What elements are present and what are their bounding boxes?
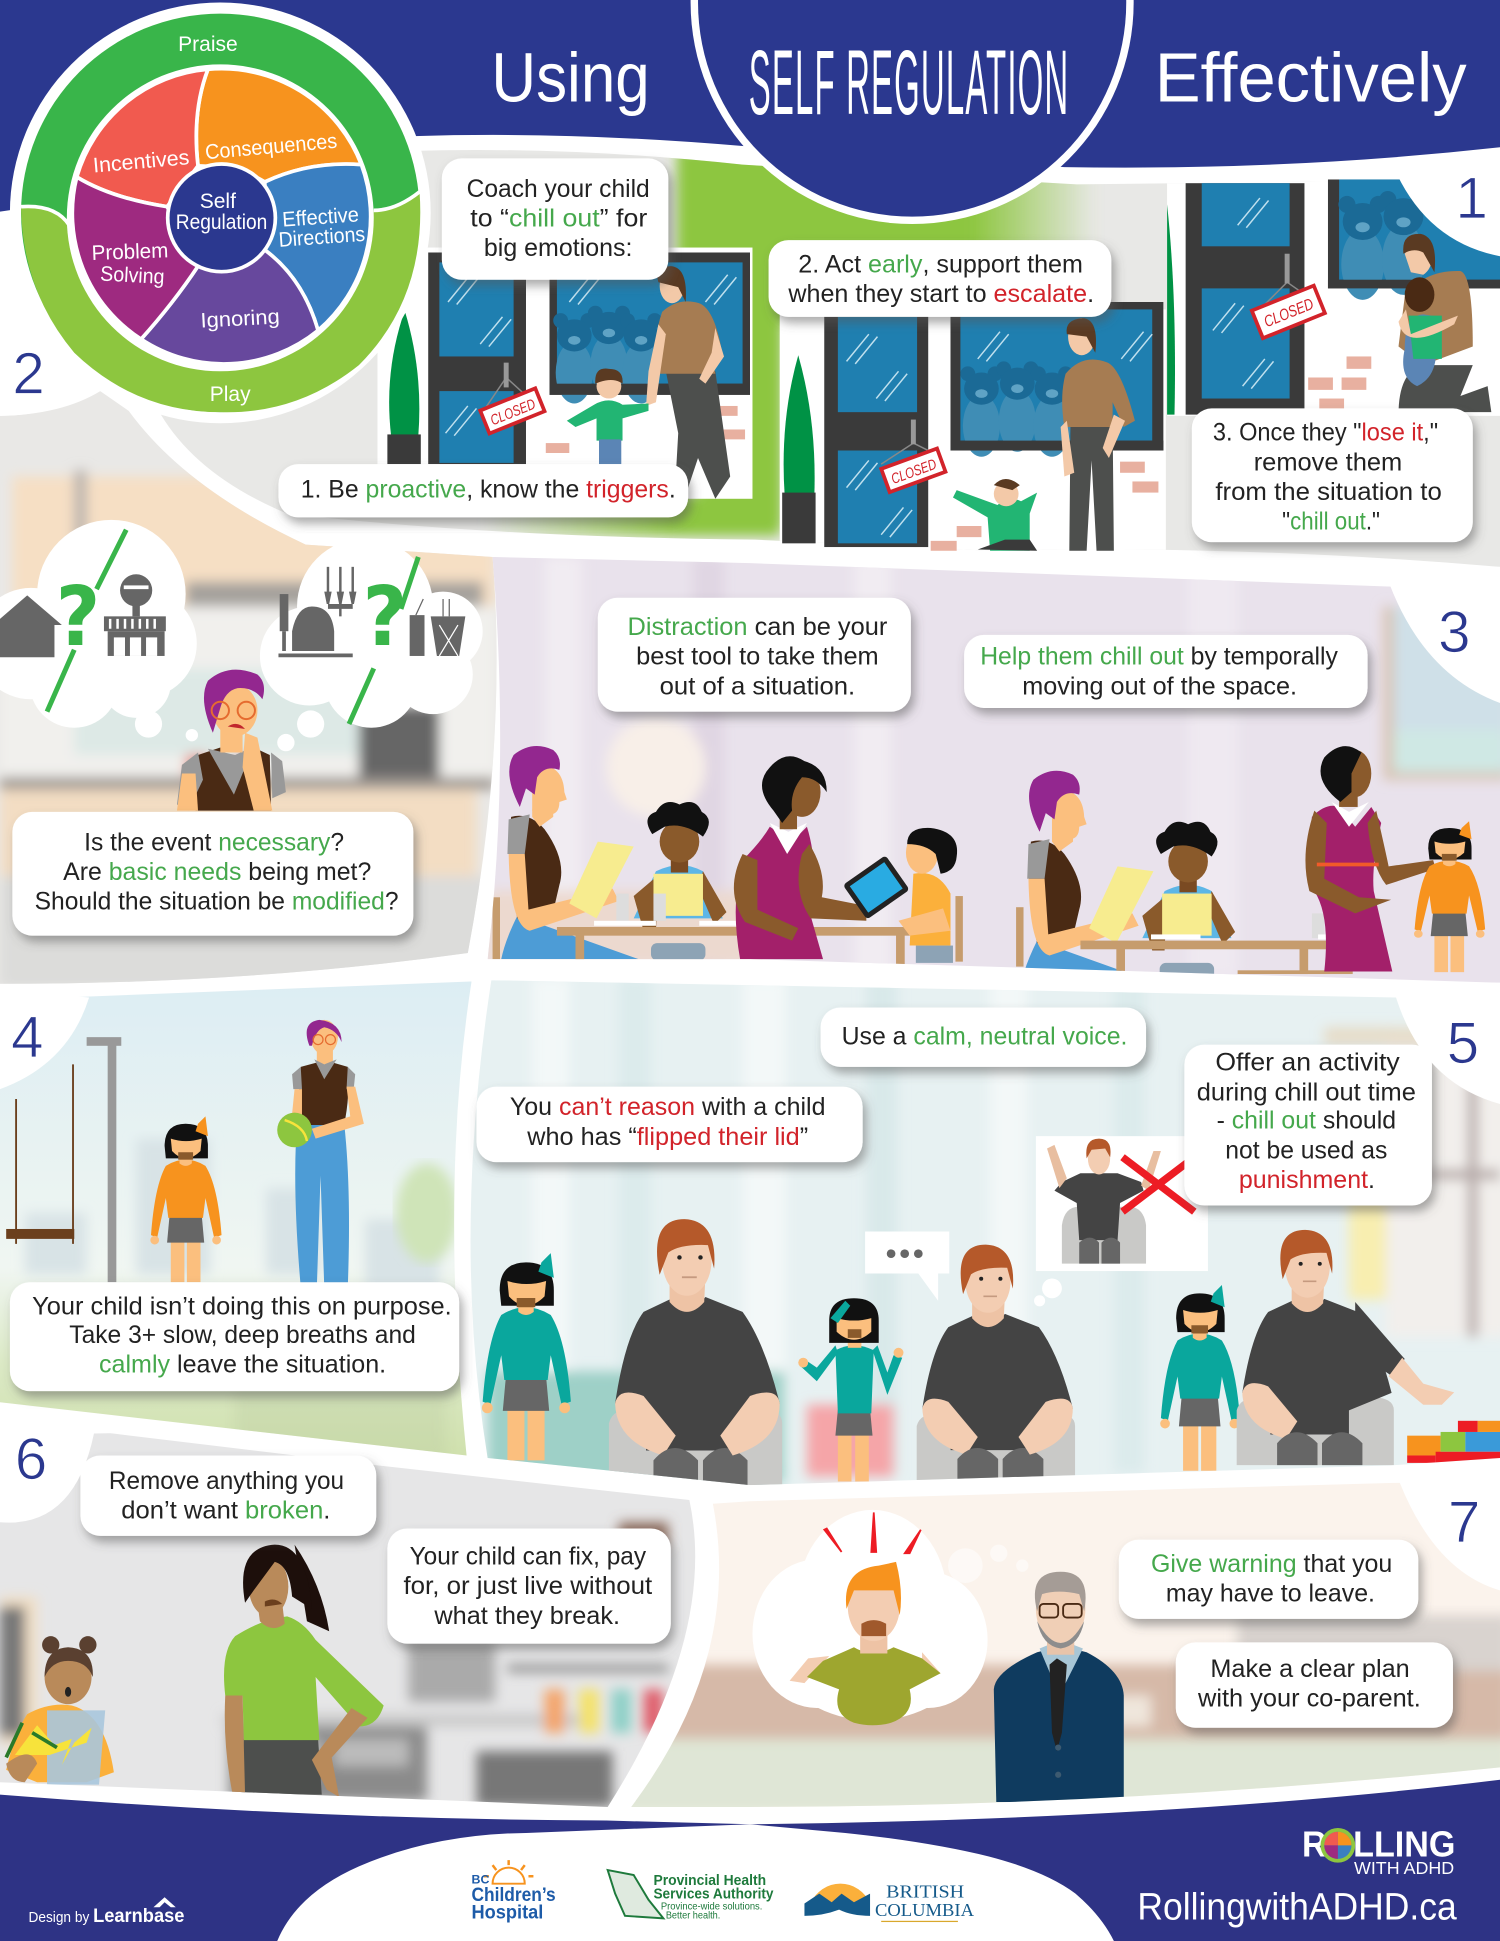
callout: act early: 2. Act early, support them [798, 251, 1083, 278]
callout: calm neutral voice: Use a calm, neutral voice. [842, 1024, 1127, 1051]
wheel hub [166, 162, 277, 274]
number corners [0, 149, 1500, 1590]
title: Self Regulation: SELF REGULATION [749, 31, 1068, 134]
figure: girl breaking airplane [6, 1636, 114, 1785]
table group two [1016, 746, 1485, 984]
callout: is the event necessary: Should the situation be modified? [35, 889, 399, 916]
scene: father hugging child [1167, 179, 1500, 415]
callout: help them chill out: Help them chill out by temporally [980, 644, 1338, 671]
self regulation wheel: Directions [278, 223, 366, 252]
scene: father hugging child: CLOSED [1261, 295, 1317, 331]
icon: red X [1123, 1157, 1194, 1212]
title: Effectively: Effectively [1155, 39, 1467, 117]
self regulation wheel: Solving [100, 263, 165, 289]
callout: not on purpose: Take 3+ slow, deep breaths and [69, 1322, 416, 1349]
thought cloud: home or out: ? [56, 570, 100, 665]
footer [0, 1780, 1500, 1941]
thought image: father yelling crossed out [1036, 1136, 1208, 1271]
lego blocks [1407, 1421, 1500, 1463]
thought cloud: home or out [0, 520, 198, 741]
callout: distraction: out of a situation. [660, 673, 855, 700]
figure: woman guiding child [1305, 746, 1436, 972]
step numbers: 7 [1448, 1490, 1480, 1555]
callout: remove anything [80, 1455, 376, 1536]
self regulation wheel: Ignoring [200, 305, 280, 333]
callout: once they lose it: from the situation to [1215, 479, 1442, 506]
step numbers: 1 [1455, 166, 1488, 231]
callout: cannot reason: You can’t reason with a child [510, 1094, 825, 1121]
thought dots [1034, 1278, 1062, 1306]
callout: act early [769, 240, 1111, 317]
callout: cannot reason [476, 1087, 863, 1162]
step numbers: 3 [1438, 600, 1470, 665]
logo: British Columbia [804, 1881, 974, 1922]
figure: man in suit [994, 1572, 1124, 1802]
website url: RollingwithADHD.ca [1137, 1886, 1457, 1929]
step numbers: 4 [11, 1005, 43, 1070]
callout: not on purpose [10, 1282, 459, 1391]
title banner [0, 0, 1500, 224]
callout: remove anything: Remove anything you [109, 1468, 344, 1495]
logo: BC Children's Hospital: Hospital [472, 1902, 543, 1923]
callout: once they lose it: "chill out." [1282, 509, 1380, 536]
panel 6: remove breakables [0, 1433, 696, 1807]
callout: act early: when they start to escalate. [787, 281, 1094, 308]
callout: be proactive [278, 464, 688, 517]
callout: offer an activity: during chill out time [1197, 1079, 1416, 1106]
scene: father and child walking past toy store: CLOSED [488, 397, 538, 429]
logo: Provincial Health Services Authority: Services Authority [653, 1887, 774, 1903]
scene: child escalating, father standing [782, 302, 1163, 551]
logo: Rolling with ADHD: WITH ADHD [1354, 1858, 1454, 1878]
figure: girl yelling, calm father [798, 1245, 1075, 1481]
wheel: Ignoring [141, 250, 318, 364]
callout: coach your child: Coach your child [467, 176, 650, 203]
self regulation wheel: Effective [282, 203, 360, 232]
panel 4: playground [0, 978, 476, 1460]
figure: woman with ball [277, 1020, 364, 1287]
callout: help them chill out [964, 635, 1368, 708]
callout: offer an activity: Offer an activity [1215, 1050, 1400, 1077]
step numbers: 6 [15, 1427, 47, 1492]
title circle [691, 0, 1134, 224]
figure: thinking woman [177, 670, 286, 811]
icon: fine dining [278, 567, 356, 657]
callout: cannot reason: who has “flipped their lid” [526, 1124, 808, 1151]
table group one [493, 746, 963, 964]
callout: coach your child: to “chill out ” for [470, 206, 647, 233]
self regulation wheel: Regulation [176, 211, 267, 234]
logo: BC Children's Hospital [472, 1860, 556, 1923]
callout: give warning: Give warning that you [1151, 1551, 1392, 1578]
logo: British Columbia: COLUMBIA [875, 1900, 974, 1920]
title: Using: Using [491, 39, 650, 117]
callout: not on purpose: calmly leave the situation. [99, 1352, 386, 1379]
callout: distraction: Distraction can be your [627, 614, 887, 641]
icon: takeout [410, 599, 465, 656]
callout: offer an activity [1184, 1045, 1432, 1205]
callout: be proactive: 1. Be proactive, know the triggers. [301, 477, 676, 504]
callout: remove anything: don’t want broken. [121, 1498, 330, 1525]
self regulation wheel: Incentives [92, 146, 190, 177]
logo: Provincial Health Services Authority: Province-wide solutions. [661, 1901, 762, 1913]
callout: fix or pay [387, 1528, 671, 1644]
callout: coach your child: big emotions: [484, 235, 632, 262]
design credit: Design by Learnbase [28, 1905, 184, 1927]
panel 3: dining out distraction [470, 545, 1500, 990]
step numbers: 5 [1447, 1011, 1479, 1076]
logo: Rolling with ADHD: ROLLING [1302, 1824, 1455, 1864]
figure: frustrated woman [224, 1545, 384, 1797]
callout: offer an activity: - chill out should [1217, 1108, 1396, 1135]
callout: coach your child [442, 158, 668, 280]
figure: woman with tablet [734, 756, 910, 959]
scene: child escalating, father standing: CLOSED [889, 457, 939, 488]
white logo area [277, 1824, 1114, 1941]
thought cloud: fancy or takeout: ? [363, 570, 407, 665]
thought cloud: fancy or takeout [260, 538, 483, 751]
step numbers [11, 166, 1488, 1555]
wheel: Incentives [77, 69, 208, 207]
callout: help them chill out: moving out of the space. [1022, 673, 1297, 700]
logo: Provincial Health Services Authority: Better health. [666, 1909, 720, 1921]
callout: fix or pay: for, or just live without [403, 1573, 652, 1600]
self regulation wheel: Play [210, 383, 251, 406]
logo: Provincial Health Services Authority: Provincial Health [653, 1873, 766, 1889]
logo: BC Children's Hospital: Children’s [472, 1885, 556, 1906]
callout: distraction: best tool to take them [636, 644, 879, 671]
self regulation wheel: Praise [178, 33, 238, 56]
self regulation wheel: Consequences [204, 130, 338, 164]
step numbers: 2 [12, 342, 45, 407]
callout: not on purpose: Your child isn’t doing this on purpose. [32, 1293, 452, 1320]
callout: give warning [1119, 1540, 1418, 1619]
panel 1: chill out store-front scenes [149, 136, 1500, 582]
self regulation wheel: Self [200, 190, 236, 213]
figure: girl and seated father [482, 1219, 782, 1485]
callout: calm neutral voice [821, 1007, 1146, 1067]
callout: fix or pay: Your child can fix, pay [410, 1543, 647, 1570]
speech bubble: dots [865, 1231, 949, 1301]
swing [6, 1037, 121, 1282]
self regulation wheel: Problem [91, 239, 169, 265]
callout: distraction [598, 598, 911, 712]
thought cloud: angry co-parent [752, 1510, 1028, 1725]
callout: offer an activity: punishment. [1239, 1167, 1375, 1194]
wheel: Effective Directions [265, 164, 371, 330]
figure: angry girl [150, 1116, 222, 1282]
callout: clear plan: Make a clear plan [1210, 1656, 1410, 1683]
callout: clear plan [1176, 1642, 1453, 1728]
callout: give warning: may have to leave. [1166, 1581, 1375, 1608]
panel 2: is the event necessary [0, 384, 507, 990]
icon: diner [104, 574, 166, 656]
callout: is the event necessary [12, 812, 413, 936]
panel 5: calm father [458, 972, 1500, 1491]
callout: clear plan: with your co-parent. [1197, 1686, 1421, 1713]
logo: Provincial Health Services Authority [608, 1870, 774, 1921]
panel 7: co-parent plan [619, 1473, 1500, 1819]
callout: is the event necessary: Is the event necessary? [84, 829, 344, 856]
scene: father and child walking past toy store [387, 252, 750, 499]
callout: fix or pay: what they break. [433, 1603, 620, 1630]
figure: girl, father pointing to lego [1160, 1230, 1454, 1471]
self regulation wheel [10, 2, 431, 423]
figure: girl at table [899, 828, 957, 963]
wheel: Consequences [196, 69, 361, 182]
wheel: Problem Solving [72, 177, 198, 339]
logo: BC Children's Hospital: BC [472, 1873, 489, 1887]
callout: once they lose it: 3. Once they "lose it," [1213, 420, 1438, 447]
callout: once they lose it: remove them [1254, 449, 1402, 476]
icon: house [0, 595, 62, 657]
callout: once they lose it [1192, 408, 1473, 542]
logo: British Columbia: BRITISH [886, 1881, 964, 1901]
callout: offer an activity: not be used as [1225, 1137, 1387, 1164]
callout: is the event necessary: Are basic needs being met? [63, 859, 371, 886]
